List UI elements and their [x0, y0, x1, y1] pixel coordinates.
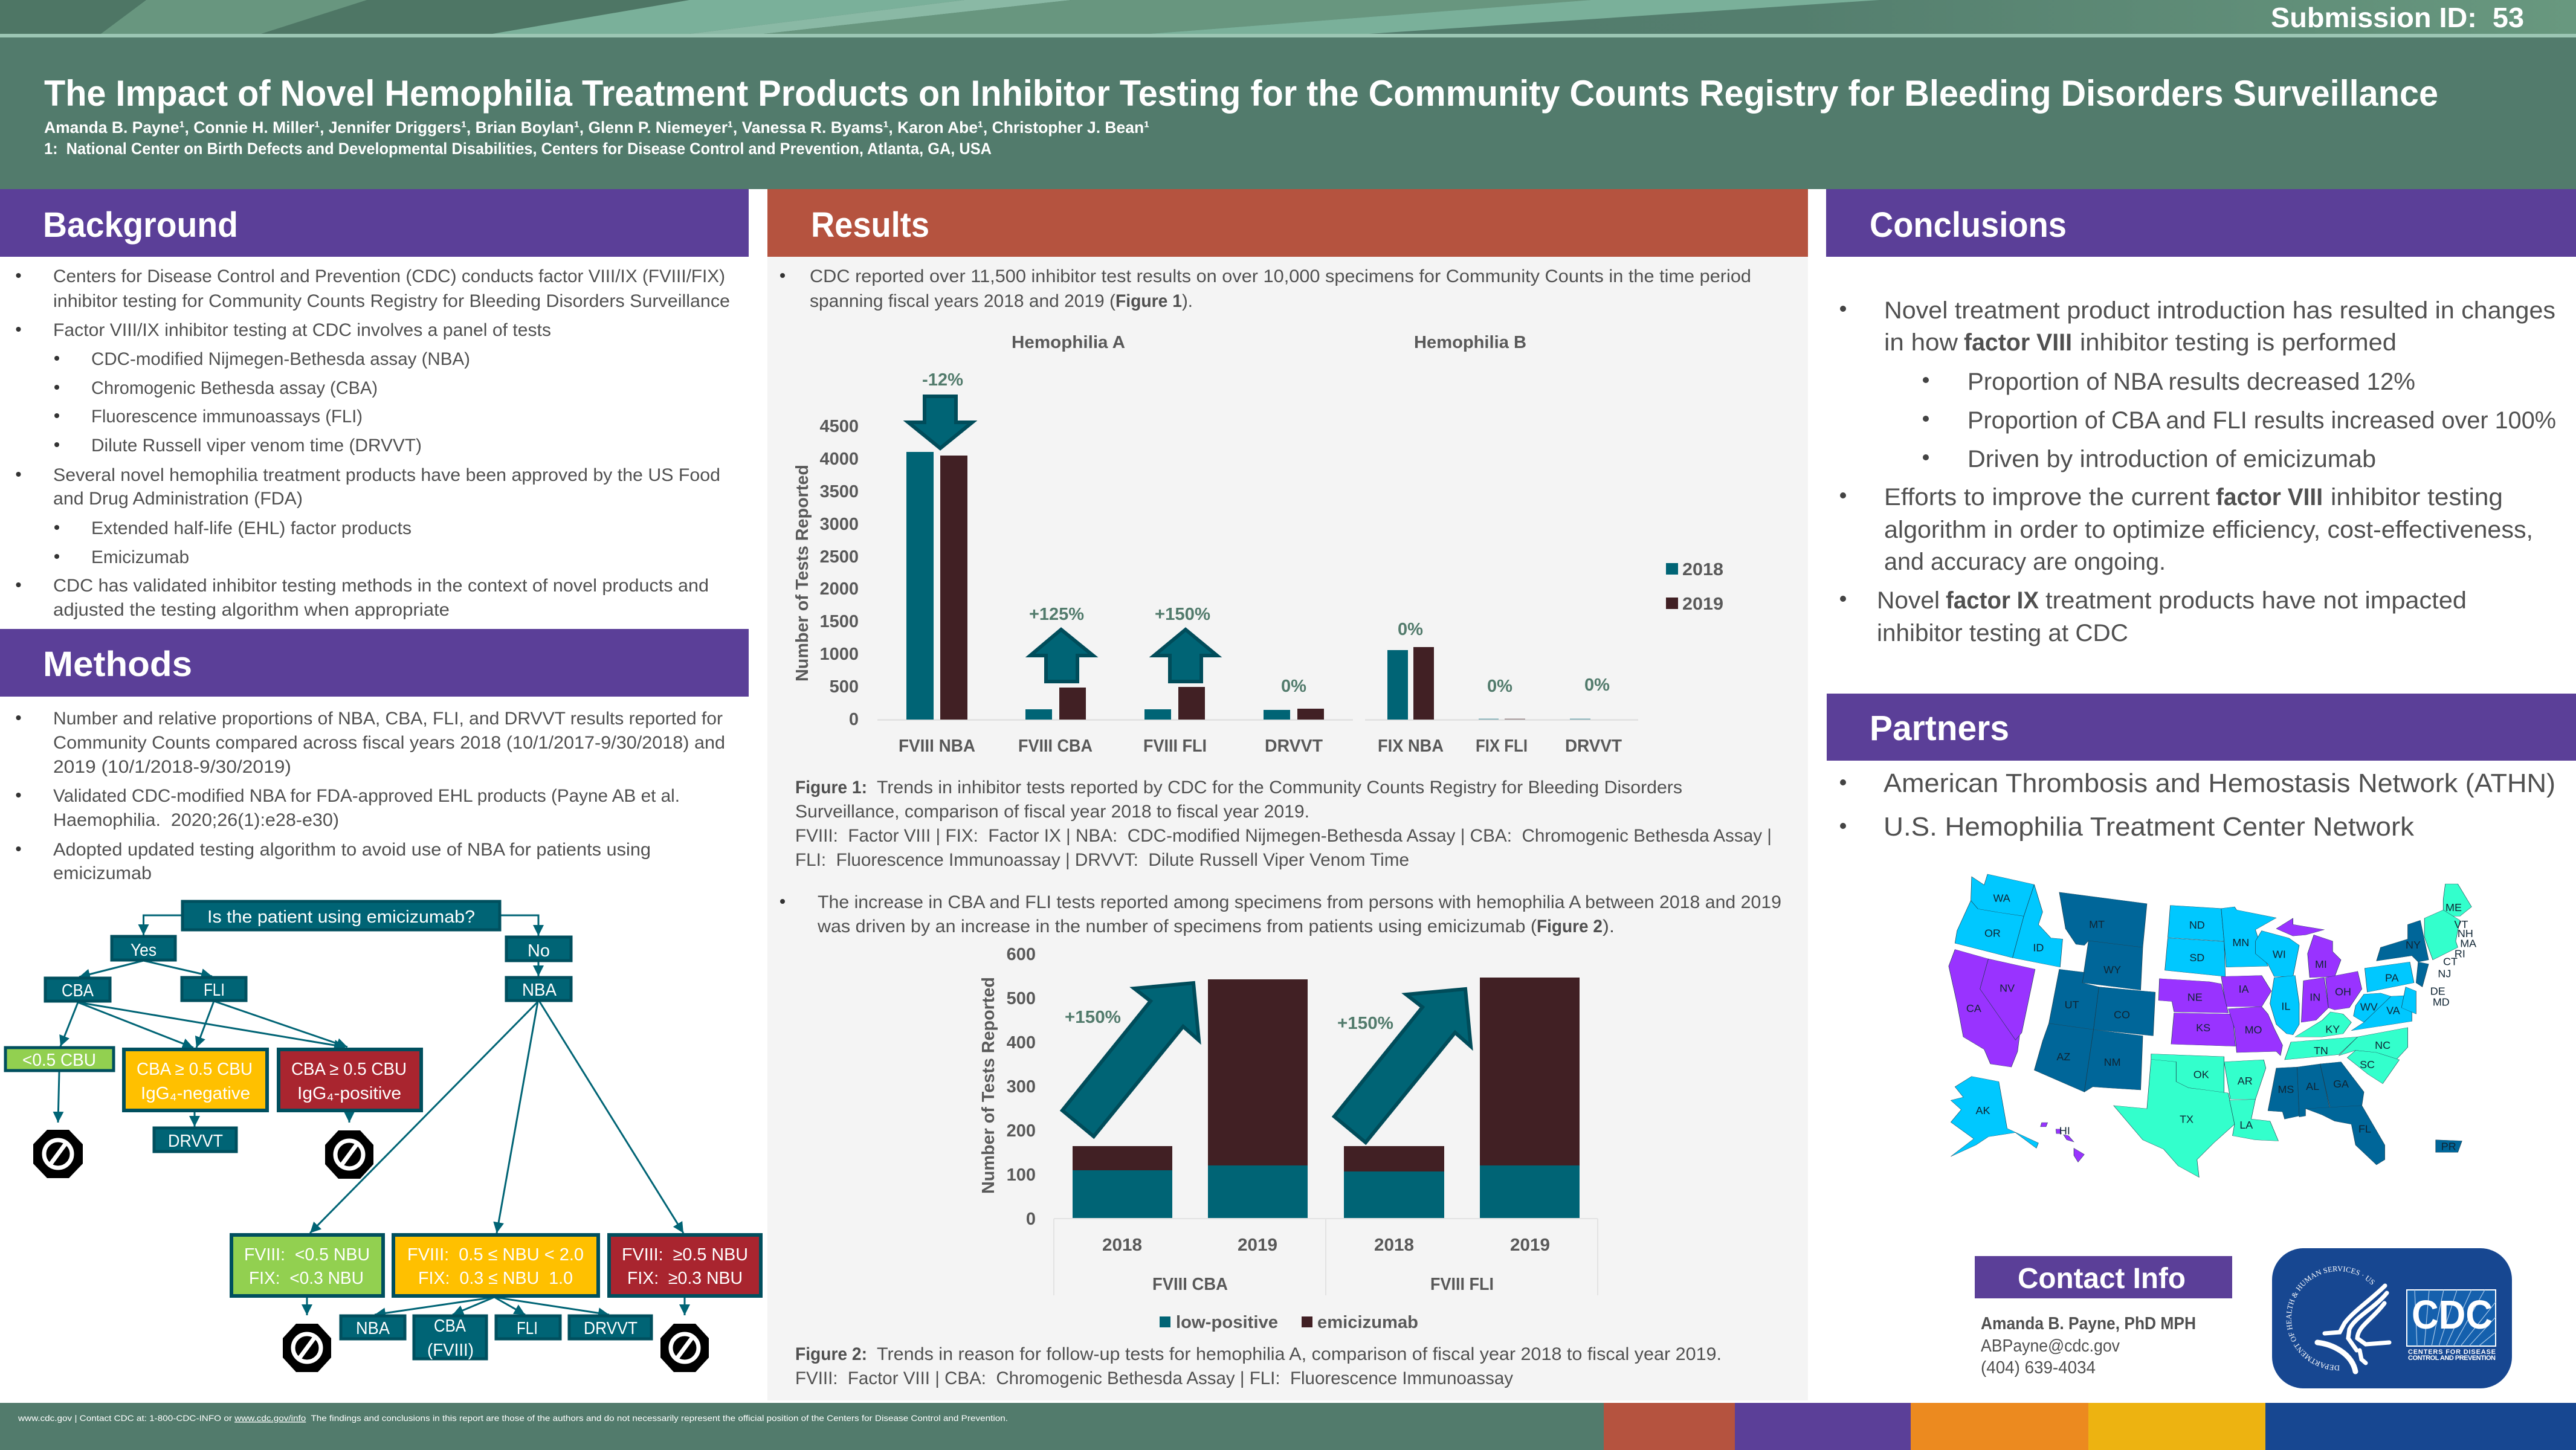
background text: Centers for Disease Control and Prevention (CDC) conducts factor VIII/IX (FVIII/FIX) [53, 266, 725, 286]
background text: CDC has validated inhibitor testing methods in the context of novel products and [53, 576, 709, 596]
arrow: increase CBA [1030, 630, 1093, 682]
axis lines [877, 719, 1638, 721]
percent change labels: 0% [1398, 620, 1423, 639]
affiliation: 1: National Center on Birth Defects and Developmental Disabilities, Centers for Disease Control and Prevention, Atlanta, GA, USA [44, 140, 992, 158]
US map of regions: ME [2445, 901, 2462, 914]
yes box [112, 936, 175, 960]
percent change labels: 0% [1584, 675, 1610, 695]
US map of regions: VA [2386, 1005, 2400, 1017]
partners list [1840, 768, 2555, 842]
figure 2 caption: FVIII: Factor VIII | CBA: Chromogenic Bethesda Assay | FLI: Fluorescence Immunoassay [795, 1368, 1513, 1388]
US map of regions: CT [2443, 955, 2458, 967]
results second bullet [780, 892, 1781, 936]
legend [1666, 560, 1723, 614]
background text: Fluorescence immunoassays (FLI) [91, 407, 363, 427]
background text: Chromogenic Bethesda assay (CBA) [91, 378, 378, 398]
US map of regions: NE [2187, 991, 2203, 1003]
x axis labels: DRVVT [1265, 736, 1323, 756]
bars 2019 [940, 456, 1525, 720]
arrow: increase CBA emicizumab [1062, 983, 1199, 1136]
panel: background [0, 189, 749, 620]
CDC wordmark: CONTROL AND PREVENTION [2408, 1355, 2496, 1362]
US map of regions: SC [2360, 1058, 2375, 1071]
heading: background: Background [43, 205, 238, 245]
conclusions text: Efforts to improve the current [1884, 484, 2210, 511]
background text: and Drug Administration (FDA) [53, 489, 303, 509]
conclusions text: inhibitor testing is performed [2080, 329, 2397, 356]
group labels: FVIII FLI [1430, 1275, 1494, 1294]
figure 2 caption [795, 1344, 1722, 1388]
y axis ticks: 200 [1007, 1121, 1036, 1141]
methods text: emicizumab [53, 863, 152, 883]
follow-up DRVVT box [569, 1316, 651, 1339]
background text: Emicizumab [91, 547, 189, 567]
CBA box [45, 978, 110, 1001]
x axis labels: FVIII CBA [1018, 736, 1093, 756]
chart group headings: Hemophilia B [1414, 333, 1526, 352]
footer band [0, 1403, 2576, 1450]
stacked bars low-positive [1073, 1165, 1580, 1218]
legend: low-positive [1176, 1313, 1278, 1332]
result: NBA negative [231, 1235, 383, 1296]
follow-up CBA box: CBA [434, 1316, 466, 1336]
heading: results: Results [811, 205, 929, 245]
heading: results [767, 189, 1808, 257]
background text: inhibitor testing for Community Counts Registry for Bleeding Disorders Surveillance [53, 291, 730, 311]
background text: Factor VIII/IX inhibitor testing at CDC involves a panel of tests [53, 320, 551, 340]
conclusions text: and accuracy are ongoing. [1884, 549, 2166, 575]
follow-up NBA box [341, 1316, 405, 1339]
legend: emicizumab [1317, 1313, 1418, 1332]
percent change labels [922, 370, 1610, 696]
percent labels: +150% [1065, 1008, 1121, 1027]
results intro text: ). [1182, 291, 1193, 311]
FLI box: FLI [204, 981, 225, 1000]
axis and dividers [1054, 1219, 1598, 1295]
figure 1 caption: Surveillance, comparison of fiscal year 2018 to fiscal year 2019. [795, 802, 1309, 822]
US map of regions: NV [2000, 982, 2015, 994]
results second bullet: Figure 2 [1537, 917, 1603, 936]
US map of regions: IA [2239, 983, 2249, 995]
background text: CDC-modified Nijmegen-Bethesda assay (NBA) [91, 349, 470, 369]
follow-up NBA box: NBA [356, 1319, 390, 1338]
results intro text [780, 266, 1751, 311]
x axis labels: FVIII NBA [899, 736, 975, 756]
results intro text: Figure 1 [1115, 291, 1182, 311]
US map of regions: UT [2065, 999, 2079, 1011]
no box: No [528, 941, 550, 961]
US map of regions: PR [2441, 1140, 2456, 1152]
US map of regions: MT [2089, 918, 2105, 930]
US map of regions: IN [2310, 991, 2320, 1003]
group labels [1152, 1275, 1494, 1294]
US map of regions: MA [2460, 937, 2476, 949]
result: NBA negative: FIX: <0.3 NBU [249, 1269, 364, 1288]
x axis labels: FVIII FLI [1143, 736, 1207, 756]
contact name: Amanda B. Payne, PhD MPH [1981, 1314, 2196, 1333]
heading: contact info [1975, 1256, 2232, 1298]
US map of regions: TX [2180, 1113, 2193, 1125]
y axis ticks: 2000 [819, 579, 859, 599]
US map of regions: NY [2406, 939, 2421, 951]
US map of regions: FL [2358, 1123, 2371, 1135]
legend: 2019 [1682, 594, 1723, 614]
y axis ticks: 3000 [819, 515, 859, 534]
results second bullet: The increase in CBA and FLI tests reported among specimens from persons with hemophilia A between 2018 and 2019 [818, 892, 1781, 912]
yes box: Yes [131, 941, 157, 960]
background text: Extended half-life (EHL) factor products [91, 518, 412, 538]
US map of regions: NM [2104, 1056, 2121, 1068]
chart group headings [1012, 333, 1526, 352]
percent change labels: +150% [1155, 605, 1210, 624]
arrow: increase FLI emicizumab [1334, 989, 1471, 1142]
CDC wordmark [2408, 1348, 2496, 1362]
background text: adjusted the testing algorithm when appropriate [53, 600, 450, 620]
percent change labels: 0% [1487, 677, 1512, 696]
US map of regions: HI [2059, 1124, 2070, 1136]
US map of regions: AR [2238, 1075, 2253, 1087]
US map of regions: WA [1993, 892, 2010, 904]
US map of regions: AK [1976, 1104, 1990, 1116]
NBA box [506, 978, 571, 1000]
methods text [16, 709, 725, 883]
conclusions text: Novel [1877, 587, 1940, 614]
conclusions text: factor VIII [2216, 484, 2323, 511]
US map of regions: TN [2314, 1045, 2328, 1057]
arrow: decrease NBA [908, 396, 972, 448]
icon: stop 3 [283, 1324, 331, 1372]
y axis ticks: 0 [1026, 1210, 1036, 1229]
US map of regions: MI [2315, 958, 2327, 970]
chart group headings: Hemophilia A [1012, 333, 1125, 352]
heading: methods: Methods [43, 645, 192, 684]
y axis ticks: 300 [1007, 1077, 1036, 1097]
US map of regions: IL [2281, 1000, 2290, 1012]
methods text: Validated CDC-modified NBA for FDA-approved EHL products (Payne AB et al. [53, 786, 680, 806]
methods text: Adopted updated testing algorithm to avoid use of NBA for patients using [53, 840, 651, 860]
partners list: American Thrombosis and Hemostasis Network (ATHN) [1884, 768, 2555, 798]
y axis ticks: 4000 [819, 450, 859, 469]
y axis ticks: 100 [1007, 1165, 1036, 1185]
US map of regions: NH [2458, 927, 2473, 939]
US map of regions: GA [2333, 1078, 2349, 1090]
footer disclaimer: www.cdc.gov | Contact CDC at: 1-800-CDC-INFO or www.cdc.gov/info The findings and conclusions in this report are those of the authors and do not necessarily represent the official position of the Centers for Disease Control and Prevention. [18, 1413, 1008, 1423]
US map of regions: MO [2245, 1023, 2262, 1036]
US map of regions: DE [2430, 985, 2445, 997]
US map of regions: WI [2273, 948, 2286, 960]
heading: conclusions [1826, 189, 2576, 257]
US map of regions: AZ [2056, 1051, 2070, 1063]
HHS eagle mark [2317, 1286, 2389, 1371]
conclusions text: in how [1884, 329, 1958, 356]
result: NBA low positive [393, 1235, 598, 1296]
US map of regions: WY [2103, 964, 2121, 976]
background text [16, 266, 730, 620]
flowchart: testing algorithm [5, 901, 761, 1372]
authors: Amanda B. Payne¹, Connie H. Miller¹, Jennifer Driggers¹, Brian Boylan¹, Glenn P. Niemeyer¹, Vanessa R. Byams¹, Karon Abe¹, Christopher J. Bean¹ [44, 118, 1149, 137]
methods text: 2019 (10/1/2018-9/30/2019) [53, 757, 291, 777]
y axis ticks: 1500 [819, 612, 859, 631]
panel: contact info [1975, 1256, 2232, 1378]
percent change labels: 0% [1281, 677, 1306, 696]
year labels: 2019 [1238, 1236, 1277, 1255]
y axis ticks: 1000 [819, 645, 859, 664]
conclusions text: Driven by introduction of emicizumab [1968, 446, 2376, 472]
US map of regions: OH [2335, 986, 2351, 998]
result: NBA positive: FVIII: ≥0.5 NBU [622, 1245, 748, 1265]
conclusions text [1840, 297, 2556, 646]
legend [1160, 1313, 1418, 1332]
figure 1 caption: FVIII: Factor VIII | FIX: Factor IX | NBA: CDC-modified Nijmegen-Bethesda Assay | CBA: Chromogenic Bethesda Assay | [795, 826, 1772, 846]
y axis ticks: 500 [830, 677, 859, 697]
icon: stop 2 [325, 1130, 373, 1179]
follow-up DRVVT box: DRVVT [584, 1319, 638, 1338]
figure 1 caption [795, 778, 1772, 870]
conclusions text: inhibitor testing at CDC [1877, 620, 2128, 646]
results intro text: spanning fiscal years 2018 and 2019 ( [810, 291, 1115, 311]
x axis labels: FIX FLI [1476, 736, 1528, 756]
y axis ticks: 0 [849, 710, 859, 729]
conclusions text: algorithm in order to optimize efficiency, cost-effectiveness, [1884, 517, 2533, 543]
icon: stop 4 [660, 1324, 709, 1372]
US map of regions: CA [1966, 1002, 1981, 1014]
result: CBA IgG4-negative: CBA ≥ 0.5 CBU [137, 1060, 253, 1079]
bars 2018 [906, 452, 1590, 720]
US map of regions: KY [2325, 1023, 2340, 1035]
US map of regions: LA [2239, 1119, 2253, 1131]
conclusions text: factor IX [1946, 587, 2039, 614]
legend: 2018 [1682, 560, 1723, 579]
x axis labels [899, 736, 1622, 756]
icon: stop 1 [33, 1130, 83, 1178]
conclusions text: Novel treatment product introduction has resulted in changes [1884, 297, 2555, 324]
heading: background [0, 189, 749, 257]
methods text: Community Counts compared across fiscal years 2018 (10/1/2017-9/30/2018) and [53, 733, 725, 753]
panel: partners [1827, 694, 2576, 1178]
US map of regions: OR [1984, 927, 2001, 939]
conclusions text: factor VIII [1964, 329, 2072, 356]
result: CBA IgG4-positive: CBA ≥ 0.5 CBU [291, 1060, 407, 1079]
DRVVT box: DRVVT [168, 1132, 223, 1151]
year labels: 2019 [1510, 1236, 1550, 1255]
conclusions text: treatment products have not impacted [2045, 587, 2467, 614]
heading: methods [0, 629, 749, 697]
US map of regions: MS [2277, 1083, 2294, 1095]
header banner [0, 0, 2576, 189]
US map of regions: OK [2193, 1068, 2209, 1080]
year labels: 2018 [1374, 1236, 1414, 1255]
contact phone: (404) 639-4034 [1981, 1358, 2096, 1378]
percent change labels: +125% [1029, 605, 1084, 624]
y axis ticks [819, 417, 859, 729]
results second bullet: was driven by an increase in the number of specimens from patients using emicizumab ( [817, 917, 1537, 936]
heading: partners [1827, 694, 2576, 761]
y axis ticks: 3500 [819, 482, 859, 501]
follow-up FLI box [496, 1316, 560, 1339]
result: CBA IgG4-negative [124, 1049, 267, 1110]
figure 1 caption: Trends in inhibitor tests reported by CDC for the Community Counts Registry for Bleeding Disorders [877, 778, 1682, 798]
y axis ticks: 2500 [819, 547, 859, 567]
result: CBA IgG4-positive: IgG₄-positive [297, 1084, 401, 1103]
US map of regions: NJ [2438, 967, 2451, 979]
results intro text: CDC reported over 11,500 inhibitor test results on over 10,000 specimens for Community Counts in the time period [810, 266, 1751, 286]
US map of regions: ND [2189, 919, 2205, 931]
result: NBA positive [609, 1235, 761, 1296]
y axis ticks [1007, 945, 1036, 1229]
result: NBA low positive: FVIII: 0.5 ≤ NBU < 2.0 [407, 1245, 584, 1265]
heading: contact info: Contact Info [2018, 1263, 2186, 1295]
no box [506, 937, 571, 961]
follow-up CBA box: (FVIII) [427, 1341, 474, 1360]
percent labels [1065, 1008, 1393, 1033]
group labels: FVIII CBA [1152, 1275, 1228, 1294]
title: The Impact of Novel Hemophilia Treatment Products on Inhibitor Testing for the Community Counts Registry for Bleeding Disorders Surveillance [44, 73, 2438, 114]
conclusions text: Proportion of NBA results decreased 12% [1968, 369, 2415, 395]
result: negative CBA [5, 1048, 114, 1071]
US map of regions [1949, 874, 2476, 1178]
heading: partners: Partners [1870, 709, 2009, 748]
US map of regions: ID [2033, 941, 2044, 953]
panel: conclusions [1826, 189, 2576, 646]
figure 2 caption: Figure 2: [795, 1344, 867, 1364]
HHS seal text: DEPARTMENT OF HEALTH & HUMAN SERVICES · USA [2287, 1266, 2375, 1370]
x axis labels: DRVVT [1565, 736, 1622, 756]
conclusions text: inhibitor testing [2331, 484, 2503, 511]
panel: methods [0, 629, 761, 1372]
result: negative CBA: <0.5 CBU [22, 1051, 96, 1070]
result: NBA negative: FVIII: <0.5 NBU [244, 1245, 370, 1265]
y axis ticks: 400 [1007, 1033, 1036, 1052]
US map of regions: VT [2454, 918, 2468, 930]
year labels: 2018 [1102, 1236, 1142, 1255]
US map of regions: PA [2385, 971, 2399, 984]
y axis title: Number of Tests Reported [979, 977, 998, 1194]
CDC wordmark: CENTERS FOR DISEASE [2408, 1348, 2496, 1356]
figure 1 caption: FLI: Fluorescence Immunoassay | DRVVT: Dilute Russell Viper Venom Time [795, 850, 1409, 870]
background text: Several novel hemophilia treatment products have been approved by the US Food [53, 465, 720, 485]
methods text: Haemophilia. 2020;26(1):e28-e30) [53, 810, 339, 830]
heading: conclusions: Conclusions [1870, 205, 2067, 245]
NBA box: NBA [522, 981, 557, 1000]
US map of regions: SD [2189, 952, 2204, 964]
results second bullet: ). [1603, 917, 1615, 936]
CDC box: CDC [2412, 1292, 2493, 1338]
result: NBA positive: FIX: ≥0.3 NBU [627, 1269, 743, 1288]
result: CBA IgG4-positive [279, 1049, 421, 1110]
stacked bars emicizumab [1073, 978, 1580, 1171]
y axis ticks: 600 [1007, 945, 1036, 964]
y axis ticks: 4500 [819, 417, 859, 436]
follow-up FLI box: FLI [517, 1319, 538, 1338]
US map of regions: WV [2360, 1001, 2378, 1013]
follow-up CBA box [414, 1316, 486, 1360]
chart: figure 1 bars [793, 333, 1723, 756]
FLI box [182, 978, 246, 1000]
result: NBA low positive: FIX: 0.3 ≤ NBU 1.0 [418, 1269, 573, 1288]
y axis title: Number of Tests Reported [793, 465, 812, 682]
figure 1 caption: Figure 1: [795, 778, 867, 798]
question box [182, 901, 500, 930]
x axis labels: FIX NBA [1378, 736, 1444, 756]
question box: Is the patient using emicizumab? [207, 907, 475, 927]
US map of regions: NC [2375, 1039, 2390, 1051]
percent labels: +150% [1337, 1014, 1393, 1033]
US map of regions: KS [2196, 1022, 2210, 1034]
methods text: Number and relative proportions of NBA, CBA, FLI, and DRVVT results reported for [53, 709, 723, 729]
year labels [1102, 1236, 1550, 1255]
chart: figure 2 stacked bars [979, 945, 1598, 1332]
US map of regions: MD [2433, 996, 2450, 1008]
percent change labels: -12% [922, 370, 963, 390]
arrow: increase FLI [1154, 630, 1217, 682]
US map of regions: RI [2455, 948, 2465, 960]
figure 2 caption: Trends in reason for follow-up tests for hemophilia A, comparison of fiscal year 2018 to fiscal year 2019. [877, 1344, 1722, 1364]
contact email: ABPayne@cdc.gov [1981, 1336, 2120, 1356]
US map of regions: CO [2114, 1008, 2130, 1020]
submission id: Submission ID: 53 [2271, 2, 2524, 33]
conclusions text: Proportion of CBA and FLI results increased over 100% [1968, 407, 2556, 434]
US map of regions: AL [2306, 1080, 2319, 1092]
panel: results [767, 189, 1808, 1400]
CBA box: CBA [62, 981, 94, 1000]
partners list: U.S. Hemophilia Treatment Center Network [1884, 812, 2415, 842]
background text: Dilute Russell viper venom time (DRVVT) [91, 436, 422, 456]
y axis ticks: 500 [1007, 989, 1036, 1008]
DRVVT box [154, 1128, 236, 1152]
result: CBA IgG4-negative: IgG₄-negative [141, 1084, 250, 1103]
US map of regions: MN [2232, 936, 2249, 949]
